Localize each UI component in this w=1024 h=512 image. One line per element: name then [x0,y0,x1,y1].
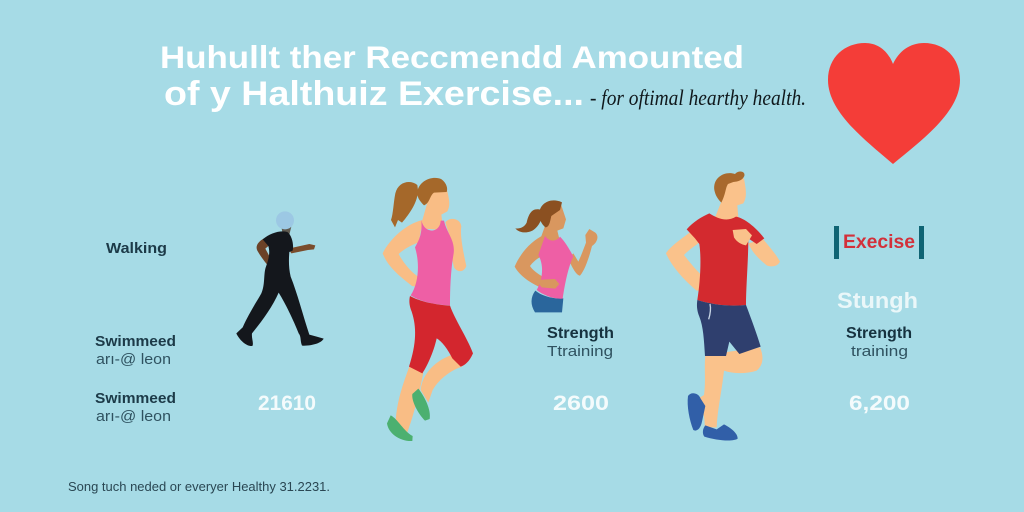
hair [714,172,744,203]
arms [257,238,275,268]
blue shoes [688,393,738,441]
neck and face [420,187,449,230]
ponytail [515,209,542,232]
black body and legs [236,231,324,346]
figure: woman in pink top and red capris [383,178,473,441]
value: 6,200: 6,200 [849,392,910,415]
hand on chest [733,229,752,245]
title [160,39,744,113]
rear leg [421,355,462,403]
label: walking: Walking [106,240,167,257]
figure: woman in pink top, cropped at waist [515,200,597,312]
red capris [409,296,473,373]
label: strength training right: training [851,343,908,360]
label: swimming row one [95,333,176,368]
navy shorts [697,300,761,356]
right arm [568,229,597,276]
legs [699,347,762,427]
left arm [666,230,715,291]
value: 2600: 2600 [553,392,609,415]
left arm [515,235,558,289]
label: swimming row two: Swimmeed [95,390,176,407]
value: 21610: 21610 [258,392,316,415]
right arm [445,219,466,271]
badge: exercise [834,226,924,259]
footer note: Song tuch neded or everyer Healthy 31.2231. [68,480,330,494]
pink top [537,236,573,299]
right arm [748,239,780,266]
pink tank top [411,220,454,305]
label: swimming row two [95,390,176,425]
neck and face [540,203,566,242]
neck [281,227,291,235]
label: strength training right [846,325,912,360]
label: swimming row two: arı-@ leon [96,408,171,425]
title: of y Halthuiz Exercise... [164,75,584,113]
label: strength training right: Strength [846,325,912,342]
title: Huhullt ther Reccmendd Amounted [160,39,744,75]
ponytail [391,182,418,227]
shorts drawstring stripe [709,304,711,319]
neck and face [715,178,746,222]
blue shorts [532,291,563,312]
green shoes [387,389,430,441]
swim cap head [276,211,294,229]
handwritten subtitle: - for oftimal hearthy health. [590,85,806,110]
heading: stungh: Stungh [837,288,918,313]
figure: man in red t-shirt and navy shorts [666,172,780,441]
label: strength training center: Ttraining [547,343,613,360]
badge: exercise: Execise [843,232,915,253]
hair [539,200,562,227]
label: strength training center: Strength [547,325,614,342]
figure: walker in black [236,211,324,346]
icon: heart [828,43,960,164]
label: swimming row one: Swimmeed [95,333,176,350]
red t-shirt [687,213,764,306]
left arm [383,220,427,288]
hair [417,178,447,205]
hand [536,279,559,289]
label: strength training center [547,325,614,360]
label: swimming row one: arı-@ leon [96,351,171,368]
front leg [395,367,423,434]
